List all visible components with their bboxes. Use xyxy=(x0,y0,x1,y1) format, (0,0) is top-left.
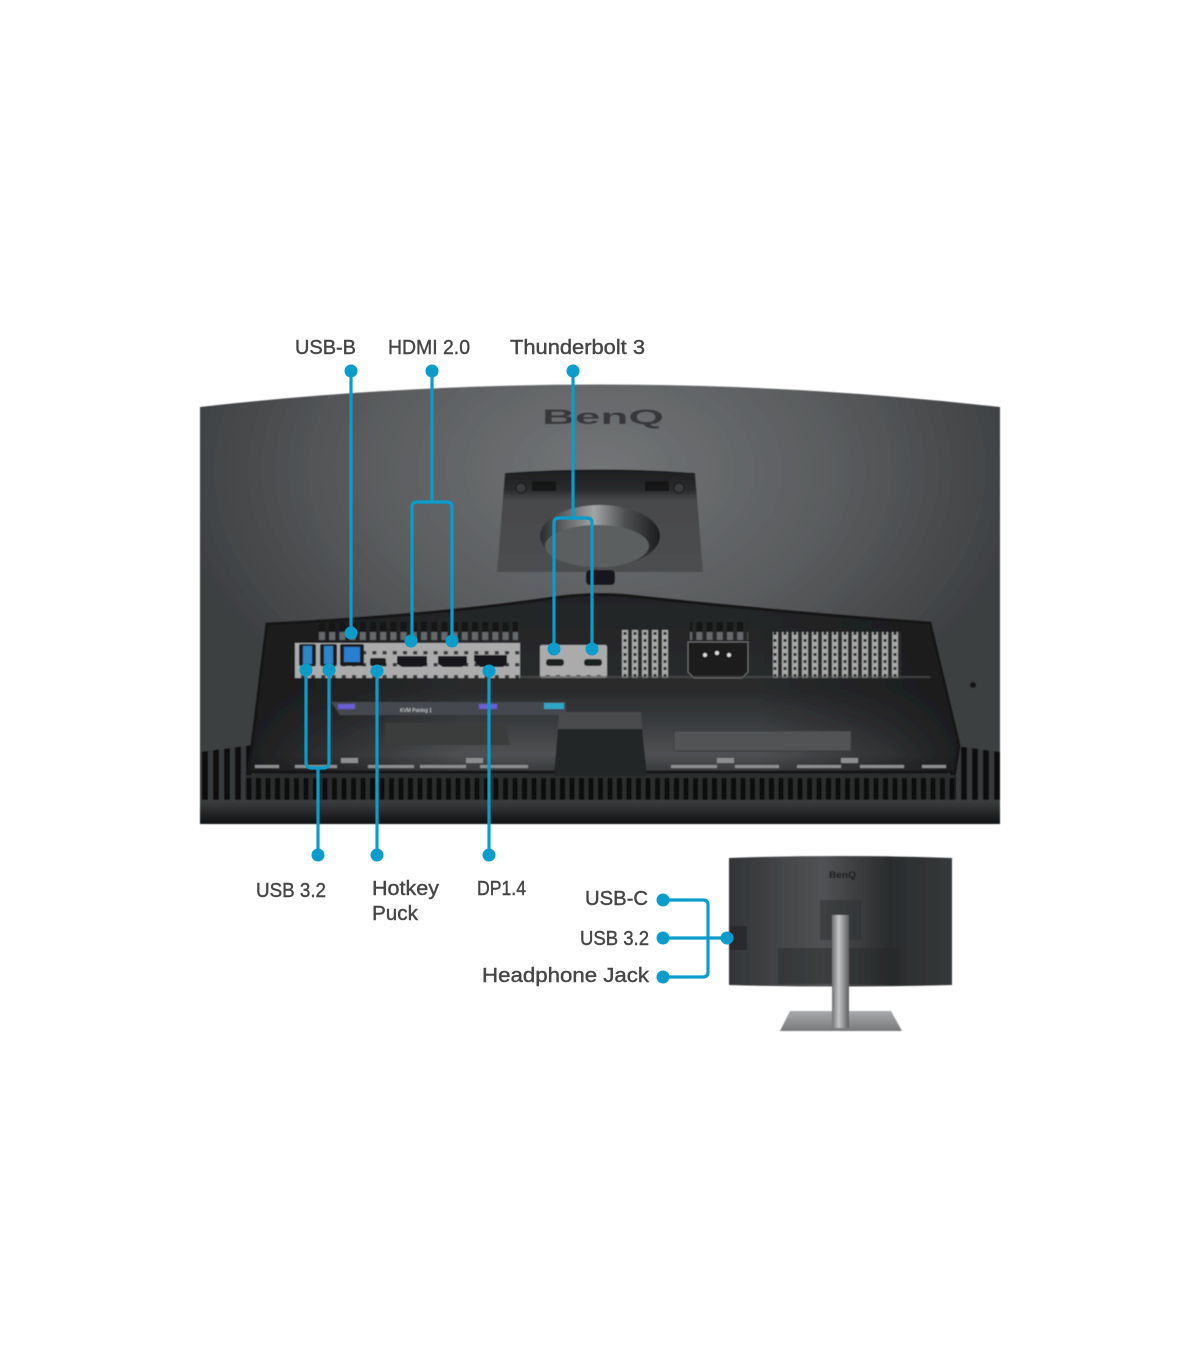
small panel recess xyxy=(820,900,861,940)
HDMI ports xyxy=(397,656,427,667)
callout: USB-B xyxy=(295,337,358,640)
vent grille large xyxy=(773,632,901,678)
plate baseline xyxy=(520,676,930,678)
micro port xyxy=(370,658,386,666)
bottom edge strip xyxy=(200,800,1000,824)
callout: Hotkey Puck: Puck xyxy=(372,903,419,925)
callout: HDMI 2.0 xyxy=(388,337,470,648)
callout: Hotkey Puck xyxy=(370,664,439,925)
USB 3.2 ports xyxy=(299,644,316,666)
callout: USB 3.2 rear: USB 3.2 xyxy=(256,880,326,902)
callout: side ports: USB-C xyxy=(585,888,648,910)
KVM label strip: KVM Pairing 1 xyxy=(400,708,432,714)
stand mount recess xyxy=(497,470,703,585)
Thunderbolt plate xyxy=(540,645,607,678)
callout: Thunderbolt 3 xyxy=(510,337,645,656)
callout: Hotkey Puck: Hotkey xyxy=(372,878,439,900)
monitor body xyxy=(200,384,1000,824)
large side vents left xyxy=(200,745,256,800)
USB-B port xyxy=(340,644,364,666)
small brand logo: BenQ xyxy=(829,870,856,880)
lower vent strip xyxy=(245,775,955,800)
callout: DP1.4 xyxy=(477,664,526,900)
callout: side ports: USB 3.2 xyxy=(580,928,649,950)
small monitor full view xyxy=(729,856,952,1031)
upper vents power xyxy=(690,612,748,642)
small monitor panel xyxy=(729,856,952,986)
vent grille small xyxy=(622,630,669,678)
stand pole xyxy=(832,915,849,1028)
port recess xyxy=(248,594,959,772)
callout: HDMI 2.0: HDMI 2.0 xyxy=(388,337,470,359)
right side button xyxy=(970,682,976,688)
callout: DP1.4: DP1.4 xyxy=(477,878,526,900)
callout: side ports: Headphone Jack xyxy=(482,965,650,987)
callout: USB-B: USB-B xyxy=(295,337,356,359)
centre cable cover xyxy=(554,712,647,776)
callout: Thunderbolt 3: Thunderbolt 3 xyxy=(510,337,645,359)
KVM label strip xyxy=(331,702,566,715)
large side vents right xyxy=(946,745,1000,800)
power socket xyxy=(688,642,748,678)
DisplayPort xyxy=(474,655,507,667)
recess side shading xyxy=(248,594,959,772)
side ports xyxy=(729,926,747,950)
upper vents left xyxy=(318,610,518,643)
callout: USB 3.2 rear xyxy=(256,664,336,902)
lower clip highlights xyxy=(255,758,946,768)
brand logo on back: BenQ xyxy=(542,406,664,429)
lower recess panels xyxy=(385,723,510,745)
silver port plate xyxy=(295,643,520,678)
callout: side ports xyxy=(482,888,734,987)
stand base xyxy=(780,1011,902,1031)
rear lower frame xyxy=(200,772,1000,824)
main monitor back view xyxy=(200,384,1000,824)
